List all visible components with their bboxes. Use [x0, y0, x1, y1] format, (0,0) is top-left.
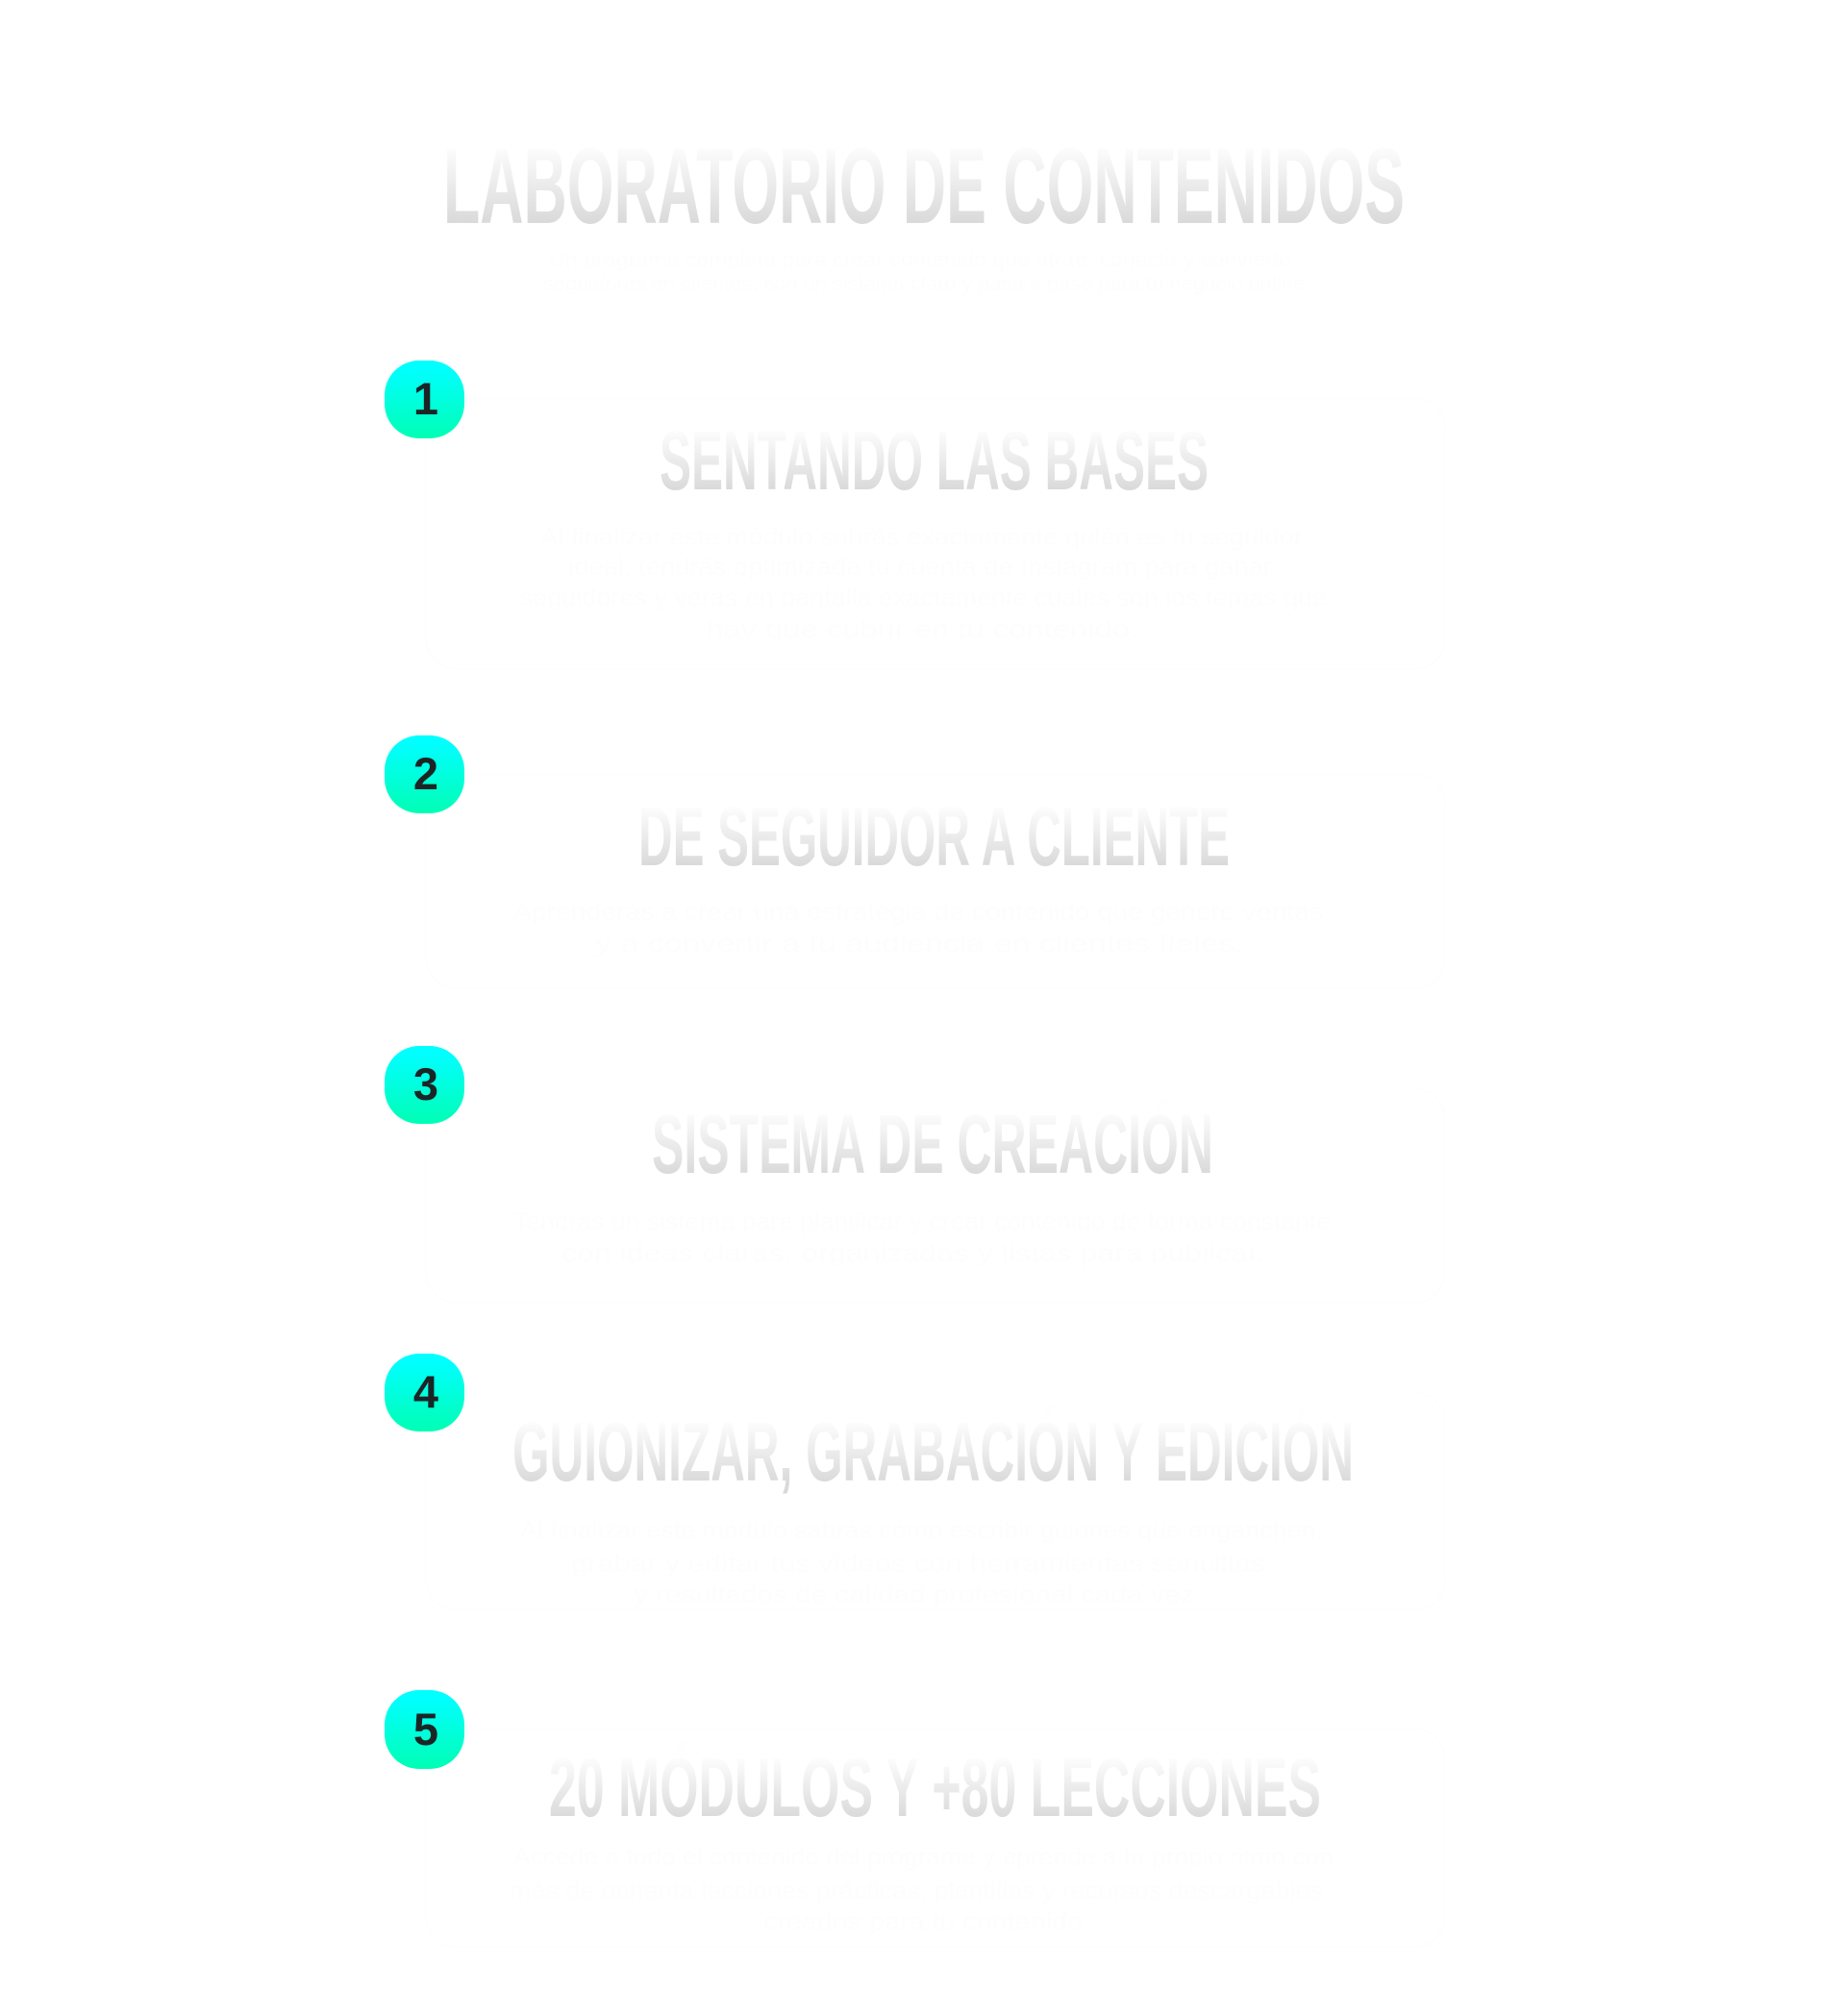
- body text 1: ideal, tendrás optimizada tu cuenta de Instagram para ganar: [568, 554, 1272, 581]
- body text 4: y resultados de calidad profesional cada vez.: [634, 1581, 1203, 1608]
- badge 5: [385, 1690, 464, 1769]
- badge 5: 5: [413, 1704, 438, 1755]
- badge 1: [385, 361, 464, 438]
- body text 4: Al finalizar este módulo sabrás cómo escribir guiones que enganchen,: [520, 1517, 1323, 1544]
- card 3 background: [426, 1088, 1445, 1303]
- badge 3: 3: [413, 1058, 438, 1109]
- body text 1: Al finalizar este módulo sabrás exactamente quién es tu seguidor: [540, 524, 1303, 551]
- card 5 background: [426, 1729, 1445, 1947]
- badge 4: [385, 1354, 464, 1431]
- body text 2: Aprenderás a crear una estrategia de contenido que genere ventas: [513, 899, 1323, 926]
- intro text: [543, 249, 1305, 295]
- body text 4: [520, 1517, 1323, 1608]
- body text 5: [510, 1844, 1334, 1935]
- body text 1: [520, 524, 1327, 643]
- body text 2: y a convertir a tu audiencia en clientes fieles.: [595, 931, 1244, 958]
- heading: 20 módulos y +80 lecciones: 20 MÓDULOS Y +80 LECCIONES: [549, 1741, 1321, 1834]
- badge 2: 2: [413, 748, 438, 799]
- body text 3: [513, 1208, 1331, 1267]
- badge 2: [385, 735, 464, 813]
- body text 1: hay que cubrir en tu contenido.: [706, 616, 1138, 643]
- heading: sentando las bases: SENTANDO LAS BASES: [660, 414, 1209, 508]
- body text 4: grabar y editar tus vídeos con herramientas sencillas: [571, 1551, 1265, 1578]
- body text 2: [513, 899, 1323, 958]
- panel: módulo 4: [426, 1392, 1445, 1610]
- panel: módulo 5: [426, 1729, 1445, 1947]
- body text 3: con ideas claras, organizadas y listas para publicar.: [561, 1240, 1265, 1267]
- badge 4: 4: [413, 1366, 438, 1417]
- body text 5: Accede a todo el contenido del programa y aprende a tu propio ritmo con: [513, 1844, 1334, 1871]
- panel: módulo 1: [426, 398, 1445, 669]
- card 1 background: [426, 398, 1445, 669]
- panel: módulo 2: [426, 774, 1445, 988]
- heading: de seguidor a cliente: DE SEGUIDOR A CLIENTE: [638, 790, 1230, 884]
- badge 1: 1: [413, 373, 438, 424]
- body text 3: Tendrás un sistema para planificar y crear contenido de forma constante: [513, 1208, 1331, 1235]
- intro text: Un programa completo para crear contenido que atrae, conecta y convierte: [549, 249, 1291, 271]
- card 4 background: [426, 1392, 1445, 1610]
- body text 1: seguidores y verás en pantalla exactamente cuáles son los temas que: [520, 585, 1327, 611]
- card 2 background: [426, 774, 1445, 988]
- badge 3: [385, 1046, 464, 1124]
- panel: módulo 3: [426, 1088, 1445, 1303]
- body text 5: más de ochenta lecciones prácticas, plantillas y recursos descargables: [510, 1878, 1323, 1904]
- intro text: seguidores en clientes, con un sistema claro y paso a paso para tu negocio online: [543, 273, 1305, 295]
- heading: sistema de creación: SISTEMA DE CREACIÓN: [652, 1098, 1213, 1191]
- body text 5: creados para tu contenido.: [763, 1908, 1090, 1935]
